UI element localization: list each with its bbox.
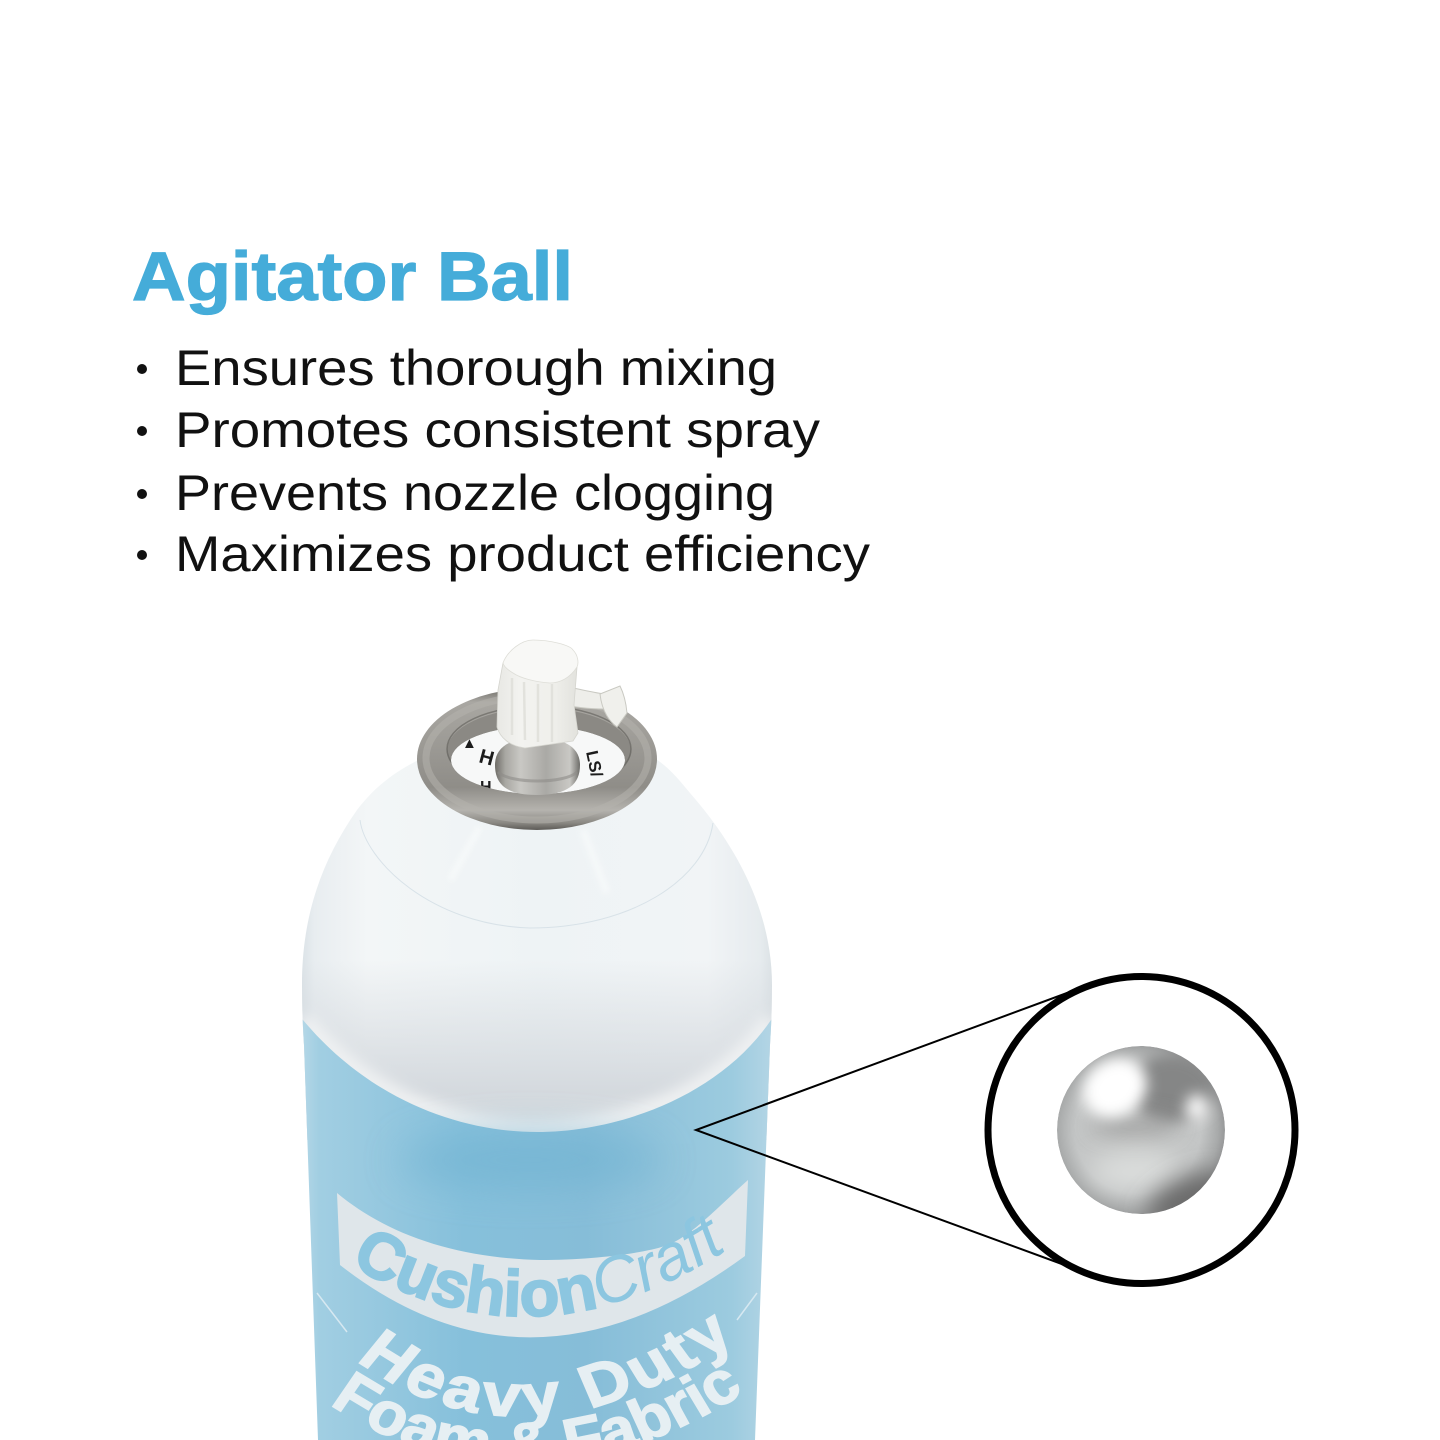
blue label (302, 1020, 772, 1440)
spray actuator (497, 640, 627, 748)
paper disc: H (477, 746, 496, 771)
paper disc: LS/ (582, 749, 606, 779)
callout lines (696, 993, 1070, 1267)
can body (302, 760, 772, 1440)
product name: Heavy Duty (358, 1314, 728, 1430)
paper disc: ▲ (462, 735, 477, 752)
magnifier circle (988, 976, 1295, 1284)
infographic canvas (133, 249, 1298, 1440)
icon: steel agitator ball (1057, 1046, 1225, 1214)
bullet: thorough mixing: Ensures thorough mixing (175, 340, 777, 396)
bullet list (137, 340, 870, 582)
dome seam (360, 820, 713, 928)
paper disc: H (480, 779, 492, 796)
bullet: consistent spray: Promotes consistent spray (175, 402, 820, 458)
title: Agitator Ball (132, 238, 573, 315)
nozzle spout (557, 686, 627, 727)
actuator body (497, 663, 578, 748)
metal valve cup (495, 738, 580, 795)
valve ring (417, 688, 657, 830)
paper disc (451, 726, 625, 796)
brand banner: CushionCraft (358, 1216, 724, 1318)
decorative label lines (317, 1293, 757, 1332)
bullet: prevents clogging: Prevents nozzle clogging (175, 465, 775, 521)
bullet: product efficiency: Maximizes product efficiency (175, 526, 870, 582)
spray can (302, 640, 772, 1440)
